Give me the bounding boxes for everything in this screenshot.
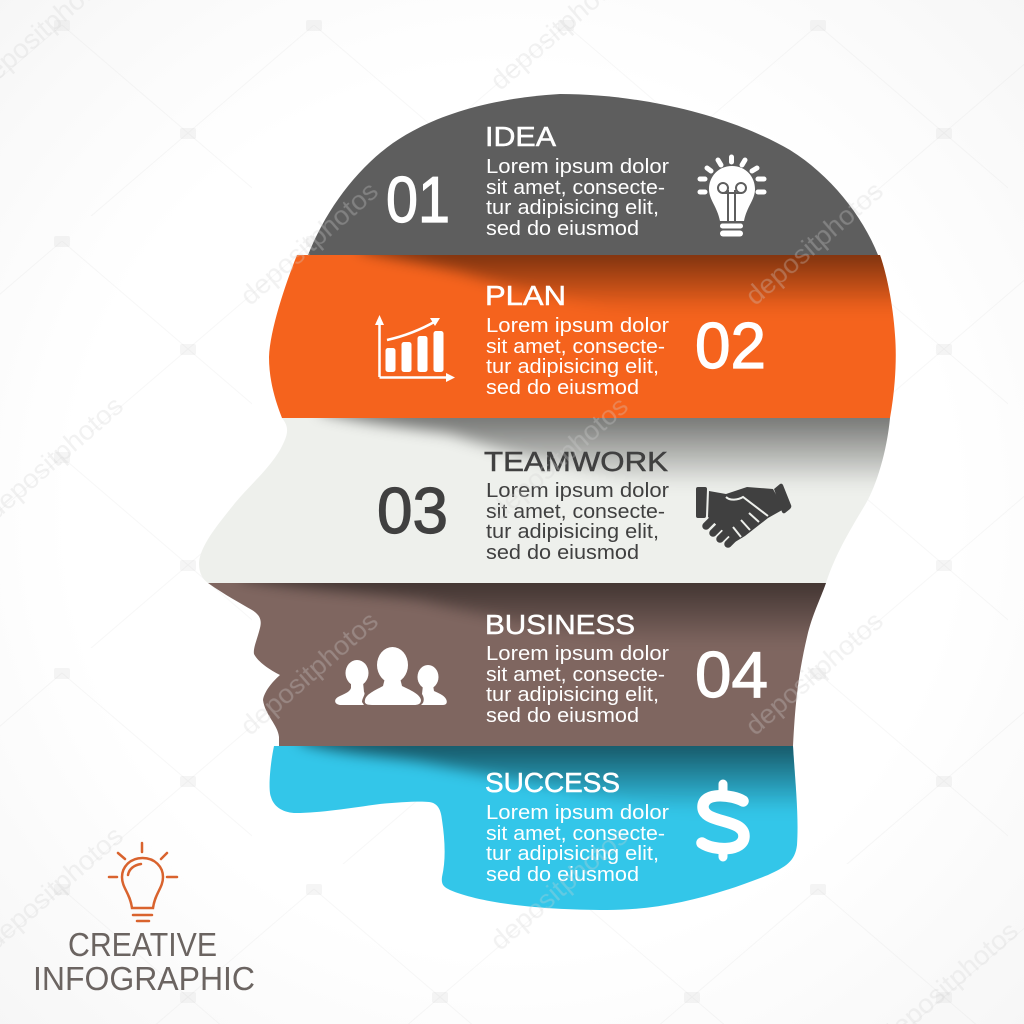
band 2: plan (orange) bbox=[269, 255, 896, 418]
icon: dollar sign bbox=[702, 784, 744, 857]
body text business: sed do eiusmod bbox=[486, 705, 639, 727]
body text teamwork: sit amet, consecte- bbox=[486, 501, 665, 523]
body text idea bbox=[486, 156, 669, 240]
body text plan: sit amet, consecte- bbox=[486, 336, 665, 358]
body text idea: sed do eiusmod bbox=[486, 218, 639, 240]
body text teamwork: sed do eiusmod bbox=[486, 542, 639, 564]
body text business: sit amet, consecte- bbox=[486, 664, 665, 686]
number 01: 01 bbox=[386, 163, 450, 236]
section 4: business bbox=[335, 609, 768, 727]
body text idea: Lorem ipsum dolor bbox=[486, 156, 669, 178]
heading idea: IDEA bbox=[485, 121, 556, 152]
body text teamwork: tur adipisicing elit, bbox=[486, 521, 659, 543]
body text success: Lorem ipsum dolor bbox=[486, 802, 669, 824]
heading business: BUSINESS bbox=[485, 609, 635, 640]
body text plan: Lorem ipsum dolor bbox=[486, 315, 669, 337]
body text success bbox=[486, 802, 669, 886]
watermarks: depositphotos bbox=[234, 605, 384, 741]
text: infographic: INFOGRAPHIC bbox=[33, 960, 255, 997]
band 5: success (cyan) bbox=[270, 746, 798, 910]
watermarks: depositphotos bbox=[739, 175, 889, 311]
heading plan: PLAN bbox=[485, 280, 566, 311]
section 1: idea bbox=[386, 121, 764, 240]
number 04: 04 bbox=[695, 638, 768, 711]
watermarks: depositphotos bbox=[234, 175, 384, 311]
watermarks: depositphotos bbox=[484, 820, 634, 956]
body text business: tur adipisicing elit, bbox=[486, 684, 659, 706]
body text business: Lorem ipsum dolor bbox=[486, 643, 669, 665]
heading success: SUCCESS bbox=[485, 767, 620, 798]
icon: handshake bbox=[696, 484, 791, 544]
icon: growth chart bbox=[375, 315, 455, 382]
section 3: teamwork bbox=[377, 446, 791, 564]
body text success: sed do eiusmod bbox=[486, 864, 639, 886]
watermarks: depositphotos bbox=[484, 390, 634, 526]
heading teamwork: TEAMWORK bbox=[484, 446, 668, 477]
text: creative: CREATIVE bbox=[68, 926, 217, 963]
section 5: success bbox=[485, 767, 744, 886]
icon: people bbox=[335, 647, 447, 705]
body text success: sit amet, consecte- bbox=[486, 823, 665, 845]
icon: light bulb bbox=[700, 157, 764, 236]
icon: outline bulb bbox=[109, 843, 177, 921]
body text success: tur adipisicing elit, bbox=[486, 843, 659, 865]
number 02: 02 bbox=[695, 309, 766, 382]
body text plan: sed do eiusmod bbox=[486, 377, 639, 399]
body text teamwork bbox=[486, 480, 669, 564]
head silhouette bbox=[199, 94, 920, 910]
body text plan bbox=[486, 315, 669, 399]
logo: creative infographic bbox=[33, 843, 255, 997]
section 2: plan bbox=[375, 280, 766, 399]
band 3: teamwork (off-white) bbox=[199, 418, 890, 583]
body text idea: tur adipisicing elit, bbox=[486, 197, 659, 219]
body text teamwork: Lorem ipsum dolor bbox=[486, 480, 669, 502]
body text idea: sit amet, consecte- bbox=[486, 177, 665, 199]
body text business bbox=[486, 643, 669, 727]
watermarks: depositphotos bbox=[739, 605, 889, 741]
number 03: 03 bbox=[377, 474, 448, 547]
band 1: idea (gray) bbox=[308, 94, 878, 255]
body text plan: tur adipisicing elit, bbox=[486, 356, 659, 378]
band 4: business (brown) bbox=[208, 583, 826, 746]
